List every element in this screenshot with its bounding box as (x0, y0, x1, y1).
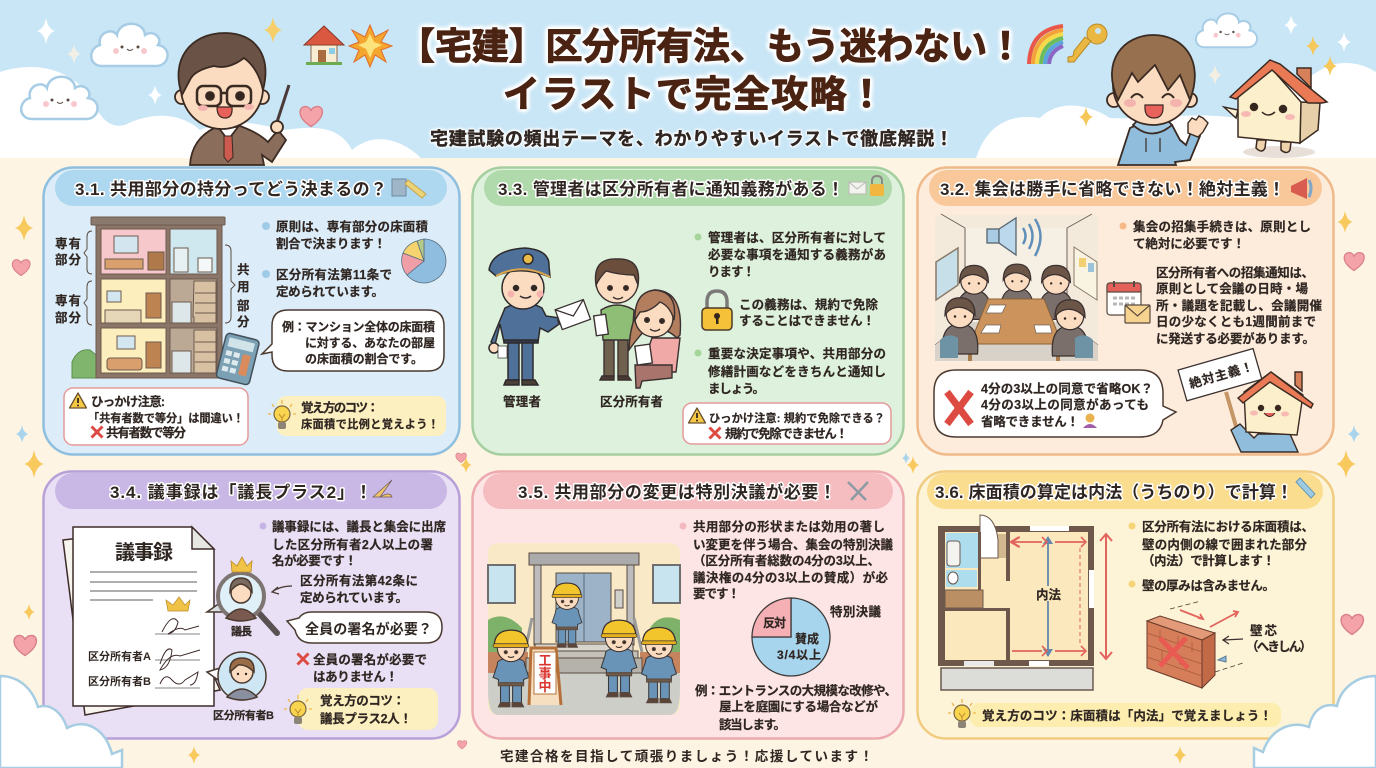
cloud: bottom right (1254, 676, 1376, 768)
document: 区分所有者B (88, 674, 151, 688)
bullet text (680, 519, 893, 601)
characters: 区分所有者 (594, 259, 680, 388)
bullet text (1120, 219, 1311, 251)
heading pill (483, 473, 893, 509)
character: house mascot with hoodie (1231, 372, 1313, 452)
heading pill (484, 170, 892, 206)
bullet text (1128, 519, 1314, 593)
label: 議長: 議長 (231, 624, 252, 638)
callout: 例: に対する、あなたの部屋 (305, 335, 435, 350)
bullet text: 議事録には、議長と集会に出席 (272, 519, 446, 534)
warning box (683, 403, 891, 444)
bullet text: て絶対に必要です！ (1133, 236, 1245, 251)
pie chart: 特別決議: 賛成 (795, 631, 819, 646)
text: 招集通知: 日の少なくとも1週間前まで (1156, 314, 1316, 329)
sign: 工事中: 中 (538, 679, 552, 694)
floor plan: 内法 (1036, 587, 1061, 602)
callout: 全員の署名 (287, 612, 442, 643)
bullet text: 壁の内側の線で囲まれた部分 (1142, 537, 1307, 552)
floor plan (938, 515, 1094, 690)
callout: 全員の署名: 全員の署名が必要？ (305, 621, 432, 637)
callout: 省略不可: 4分の3以上の同意があっても (981, 397, 1149, 412)
illustration: meeting room (935, 214, 1098, 361)
callout: 省略不可 (934, 370, 1176, 437)
text: 不要: 全員の署名が必要で (313, 652, 427, 667)
warning box: ひっかけ注意: 規約で免除できる？ (709, 411, 885, 425)
label: 共用部分: 用 (237, 280, 250, 294)
text: 招集通知: に発送する必要があります。 (1156, 331, 1315, 346)
heading pill: 3.4. 議事録は「議長プラス2」！ (110, 483, 372, 502)
warning box: ひっかけ注意: (91, 394, 165, 409)
cloud: bottom left (0, 676, 122, 768)
calculator (216, 333, 260, 385)
arrow: 壁芯 (1223, 636, 1243, 644)
text: 第42条: 定められています。 (300, 591, 408, 605)
bullet text: 原則は、専有部分の床面積 (276, 219, 428, 234)
text: 第42条: 区分所有法第42条に (300, 573, 418, 588)
bullet text: い変更を伴う場合、集会の特別決議 (693, 537, 893, 552)
panel: 3.6 床面積 (918, 472, 1334, 738)
arrow (272, 586, 292, 594)
icon: house (304, 26, 344, 65)
panel: 3.5 共用部分の変更 (472, 472, 904, 738)
sign: 工事中: 工 (538, 653, 552, 668)
label: 共用部分: 部 (237, 298, 250, 313)
wall illustration (1147, 601, 1243, 688)
subtitle: 宅建試験の頻出テーマを、わかりやすいイラストで徹底解説！ (430, 129, 953, 149)
sign: 工事中 (529, 648, 561, 705)
tip box (284, 688, 438, 730)
character: house mascot (1224, 60, 1327, 158)
warning box: 規約で免除できません！ (725, 426, 848, 441)
bullet text: した区分所有者2人以上の署 (272, 537, 433, 552)
bullet text: 管理者は、区分所有者に対して (708, 230, 886, 245)
heading pill (55, 170, 447, 206)
bullet text: 共用部分の形状または効用の著し (693, 519, 885, 534)
label: 共用部分: 分 (237, 315, 250, 329)
panel: 3.1 共用部分の持分 (44, 168, 460, 454)
warning box: 共有者数で等分 (106, 425, 186, 440)
labels: 専有部分: 専有 (55, 236, 81, 251)
callout: 省略不可: 4分の3以上の同意で省略OK？ (981, 381, 1153, 396)
text: 招集通知: 所・議題を記載し、会議開催 (1156, 298, 1322, 313)
callout: 例: の床面積の割合です。 (305, 351, 423, 366)
labels: 専有部分: 部分 (55, 310, 81, 325)
label: 壁芯: （へきしん） (1246, 640, 1312, 654)
sign: 工事中: 事 (538, 666, 552, 681)
icon: key (1068, 24, 1107, 62)
avatar: 区分所有者B (207, 652, 266, 700)
callout: 省略不可: 省略できません！ (981, 414, 1079, 429)
labels: 管理者 区分所有者: 管理者 (503, 394, 541, 409)
panel: 3.4 議事録 (44, 472, 460, 738)
tip box: 床面積で比例と覚えよう！ (301, 417, 439, 431)
icon: lock (702, 291, 732, 330)
illustration: construction (488, 543, 680, 715)
document: 議事録 (115, 541, 173, 564)
title block (398, 26, 1024, 149)
icon: rainbow (1029, 26, 1063, 64)
labels: 専有部分: 部分 (55, 252, 81, 267)
pie chart (402, 239, 446, 283)
bullet text: 区分所有法第11条で (276, 267, 392, 282)
icon: speaker (987, 218, 1040, 256)
panel: 3.3 管理者の通知義務 (472, 168, 904, 454)
bullet text (262, 219, 428, 299)
tip box: 覚え方のコツ： (301, 400, 379, 415)
bullet text: （内法）で計算します！ (1142, 553, 1275, 568)
arrow: full height (1100, 534, 1112, 659)
sign: 絶対主義 (1178, 349, 1262, 440)
panel: 3.2 集会 (918, 168, 1334, 454)
character: boy (1107, 35, 1208, 165)
bullet text: （区分所有者総数の4分の3以上、 (693, 553, 880, 568)
bullet text: 区分所有法における床面積は、 (1142, 519, 1314, 534)
text: 招集通知 (1156, 265, 1322, 346)
character: guard (489, 248, 568, 385)
labels: 管理者 区分所有者 (503, 394, 663, 409)
icon: explosion (349, 25, 392, 67)
label: 区分所有者B: 区分所有者B (213, 708, 274, 722)
bullet text: 割合で決まります！ (276, 236, 386, 251)
character: teacher (175, 33, 289, 165)
example text (695, 683, 897, 732)
text: 招集通知: 原則として会議の日時・場 (1156, 281, 1308, 296)
heading pill (929, 170, 1322, 206)
example text: 該当します。 (719, 717, 786, 732)
tip box: 覚え方のコツ：床面積は「内法」で覚えましょう！ (982, 708, 1272, 723)
text: 第42条 (300, 573, 418, 605)
icon: calendar and envelope (1107, 281, 1150, 323)
labels: 専有部分: 専有 (55, 293, 81, 308)
document: 区分所有者A (88, 649, 151, 663)
note text: この義務は、規約で免除 (739, 297, 878, 312)
note text: することはできません！ (739, 314, 875, 328)
bullet text: 壁の厚みは含みません。 (1142, 578, 1275, 593)
text: 不要: はありません！ (313, 670, 398, 684)
document (63, 527, 220, 715)
heading pill (927, 473, 1323, 509)
title block: 【宅建】区分所有法、もう迷わない！ (398, 26, 1024, 67)
heading pill: 3.5. 共用部分の変更は特別決議が必要！ (518, 482, 836, 502)
note text: 重要な決定事項や、共用部分の (708, 346, 886, 361)
tip box (948, 699, 1281, 728)
tip box: 議長プラス2人！ (320, 711, 412, 726)
sign: 絶対主義: 絶対主義！ (1187, 359, 1255, 391)
text: 招集通知: 区分所有者への招集通知は、 (1156, 265, 1314, 280)
pie chart: 特別決議 (752, 598, 830, 676)
note text: 修繕計画などをきちんと通知し (708, 364, 886, 379)
heading pill: 3.1. 共用部分の持分ってどう決まるの？ (75, 180, 387, 199)
label: 共用部分 (225, 245, 250, 329)
magnifier: 議長 (207, 557, 277, 633)
bullet text: 要です！ (693, 587, 740, 601)
labels: 管理者 区分所有者: 区分所有者 (600, 394, 663, 409)
example text: 例：エントランスの大規模な改修や、 (695, 683, 897, 698)
building illustration (72, 217, 225, 378)
label: 壁芯 (1246, 623, 1312, 654)
note text: ましょう。 (708, 382, 765, 396)
heading pill: 3.6. 床面積の算定は内法（うちのり）で計算！ (935, 482, 1293, 502)
title block: イラストで完全攻略！ (503, 74, 885, 115)
pie chart: 特別決議: 3/4以上 (777, 648, 821, 662)
bullet text: 必要な事項を通知する義務があ (708, 247, 886, 262)
label: 共用部分: 共 (237, 263, 250, 277)
callout: 例: 例：マンション全体の床面積 (282, 319, 435, 334)
bullet text: 名が必要です！ (272, 553, 357, 568)
warning box: 「共有者数で等分」は間違い！ (88, 411, 244, 425)
icon: envelope (555, 300, 591, 330)
heading pill: 3.3. 管理者は区分所有者に通知義務がある！ (498, 179, 844, 199)
note text (694, 297, 886, 396)
bullet text: 定められています。 (276, 285, 384, 299)
label: 特別決議: 特別決議 (830, 604, 881, 619)
tip box: 覚え方のコツ： (320, 693, 405, 708)
label: 壁芯: 壁芯 (1250, 623, 1277, 638)
warning box (64, 388, 248, 445)
bullet text: ります！ (708, 265, 755, 279)
text: 不要 (298, 652, 427, 684)
tip box (268, 396, 446, 436)
footer message: 宅建合格を目指して頑張りましょう！応援しています！ (500, 748, 873, 764)
bullet text (260, 519, 446, 568)
decorative clouds (21, 13, 1257, 119)
labels: 専有部分 (55, 231, 92, 325)
bullet text: 集会の招集手続きは、原則とし (1133, 219, 1311, 234)
example text: 屋上を庭園にする場合などが (719, 699, 878, 714)
heading pill (55, 473, 447, 509)
callout: 例 (262, 310, 444, 371)
bullet text (694, 230, 886, 279)
bullet text: 議決権の4分の3以上の賛成）が必 (693, 570, 888, 585)
heading pill: 3.2. 集会は勝手に省略できない！絶対主義！ (940, 179, 1285, 199)
pie chart: 特別決議: 反対 (763, 615, 786, 630)
